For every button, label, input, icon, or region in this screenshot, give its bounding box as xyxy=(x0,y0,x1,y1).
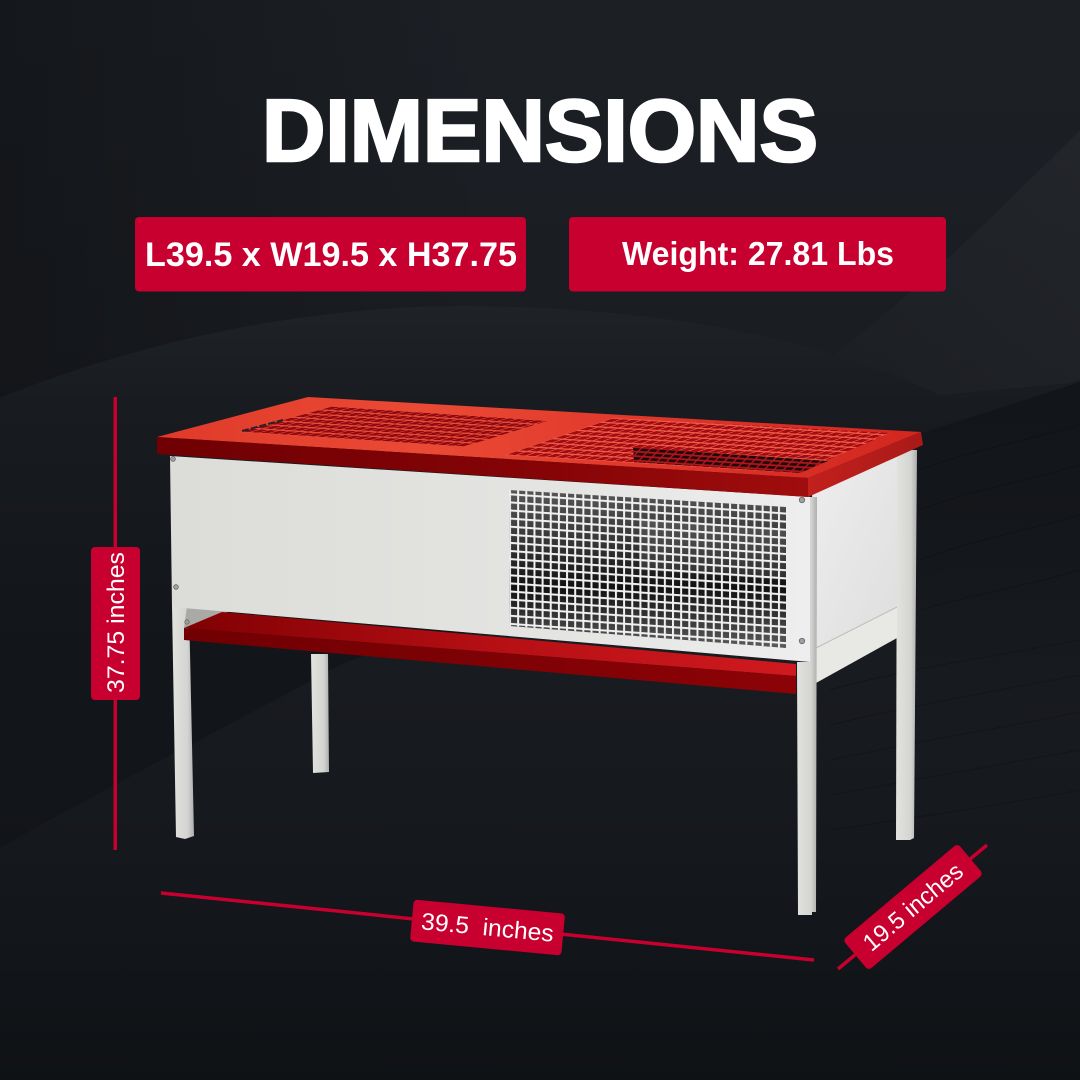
back right leg xyxy=(896,450,917,840)
length dimension: 39.5 inches xyxy=(420,908,555,948)
lid side edge xyxy=(808,432,923,497)
front mesh window xyxy=(509,490,786,648)
badge: overall size: L39.5 x W19.5 x H37.75 xyxy=(145,236,517,274)
width dimension xyxy=(838,843,987,971)
lid right mesh xyxy=(505,418,890,473)
badge: overall size xyxy=(135,217,526,292)
title: DIMENSIONS xyxy=(262,81,818,180)
height dimension xyxy=(91,397,140,850)
bottom shelf xyxy=(184,606,796,694)
front panel xyxy=(170,456,810,662)
height dimension: 37.75 inches xyxy=(103,552,130,693)
back left leg xyxy=(311,654,329,773)
badge: weight: Weight: 27.81 Lbs xyxy=(622,235,894,272)
lid front edge xyxy=(157,437,808,497)
screws xyxy=(171,457,805,644)
product: brooder cage xyxy=(157,397,923,915)
front left leg xyxy=(172,605,194,839)
lid left mesh xyxy=(239,406,547,447)
side panel xyxy=(812,450,897,683)
front right leg xyxy=(797,497,817,915)
width dimension: 19.5 inches xyxy=(858,858,969,957)
badge: weight xyxy=(569,217,946,292)
top lid xyxy=(157,397,921,478)
length dimension xyxy=(161,893,814,960)
